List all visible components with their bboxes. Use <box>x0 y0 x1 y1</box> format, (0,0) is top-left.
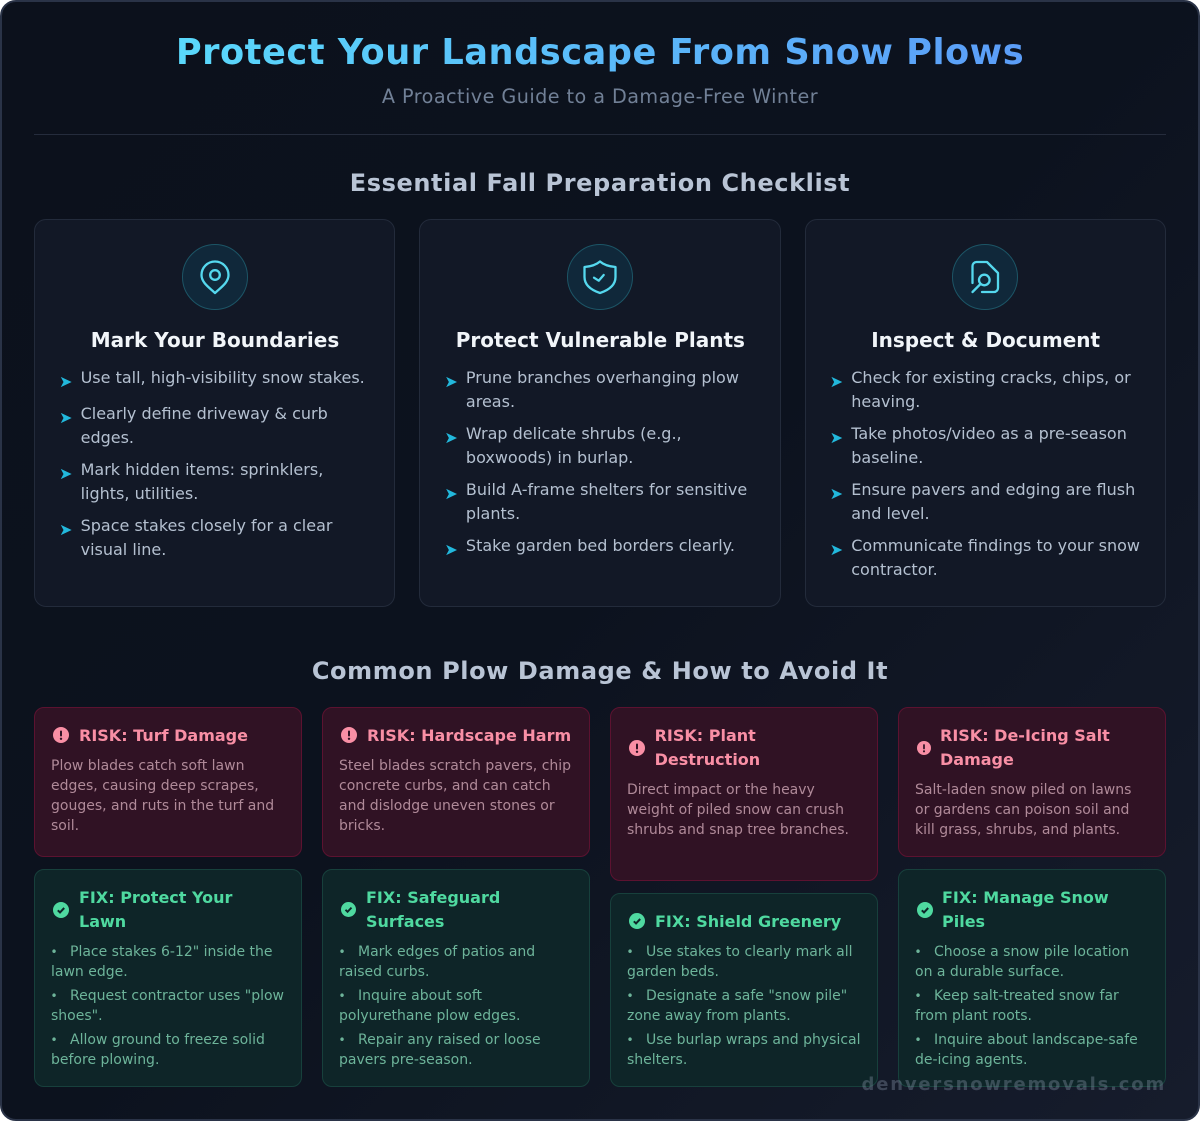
fix list: • <box>914 989 922 1003</box>
fix list <box>338 944 541 1068</box>
risk text: kill grass, shrubs, and plants. <box>915 822 1120 838</box>
heading: checklist: Essential Fall Preparation Checklist <box>350 169 850 197</box>
risk heading: RISK: Hardscape Harm <box>367 726 571 745</box>
arrow: ➤ <box>444 484 458 503</box>
fix list: • <box>914 1033 922 1047</box>
icon: check <box>917 902 933 918</box>
risk text: Steel blades scratch pavers, chip <box>339 758 571 774</box>
fix heading: Surfaces <box>366 912 444 931</box>
panel: fix shield greenery <box>610 893 878 1087</box>
risk heading <box>655 726 760 769</box>
fix list: • <box>626 945 634 959</box>
item 3 <box>466 480 747 523</box>
fix list: Choose a snow pile location <box>934 944 1129 960</box>
panel: mark your boundaries <box>34 219 395 607</box>
arrow: ➤ <box>830 372 843 391</box>
risk heading: RISK: Turf Damage <box>79 726 248 745</box>
fix heading: FIX: Shield Greenery <box>655 912 841 931</box>
item 4 <box>851 536 1140 579</box>
title: Protect Your Landscape From Snow Plows <box>176 32 1024 73</box>
item 1: heaving. <box>851 392 920 411</box>
item 3: and level. <box>851 504 930 523</box>
panel: risk de-icing salt damage <box>898 707 1166 857</box>
arrow: ➤ <box>444 540 458 559</box>
item 1: Use tall, high-visibility snow stakes. <box>81 368 365 387</box>
item 4: contractor. <box>851 560 938 579</box>
item 2 <box>81 404 328 447</box>
risk text <box>627 782 849 838</box>
fix list: de-icing agents. <box>915 1052 1027 1068</box>
item 1 <box>466 368 739 411</box>
fix list: • <box>338 1033 346 1047</box>
fix list: on a durable surface. Keep salt-treated snow far <box>915 964 1119 1004</box>
icon: document search <box>952 244 1018 310</box>
item 1: Check for existing cracks, chips, or <box>851 368 1131 387</box>
item 4: Stake garden bed borders clearly. <box>466 536 735 555</box>
fix heading: FIX: Protect Your <box>79 888 232 907</box>
item 2: Wrap delicate shrubs (e.g., <box>466 424 682 443</box>
item 4: Communicate findings to your snow <box>851 536 1140 555</box>
item 2 <box>851 424 1127 467</box>
item 3: Build A-frame shelters for sensitive <box>466 480 747 499</box>
fix list: • <box>338 945 346 959</box>
fix heading: FIX: Manage Snow <box>942 888 1109 907</box>
item 2: Take photos/video as a pre-season <box>851 424 1127 443</box>
icon: alert <box>629 740 645 756</box>
risk text: Plow blades catch soft lawn <box>51 758 244 774</box>
fix list: Mark edges of patios and <box>358 944 535 960</box>
fix list: polyurethane plow edges. Repair any raised or loose <box>339 1008 541 1048</box>
fix heading <box>79 888 232 931</box>
risk text: concrete curbs, and can catch <box>339 778 551 794</box>
risk text: soil. <box>51 818 79 834</box>
title <box>2 31 1198 75</box>
panel: fix protect your lawn <box>34 869 302 1087</box>
arrow: ➤ <box>59 408 72 427</box>
item 3 <box>851 480 1135 523</box>
watermark: denversnowremovals.com <box>862 1074 1166 1095</box>
fix heading <box>942 888 1109 931</box>
item 2: baseline. <box>851 448 923 467</box>
fix list: • <box>338 989 346 1003</box>
fix list: from plant roots. Inquire about landscape-safe <box>915 1008 1138 1048</box>
icon: alert <box>53 727 69 743</box>
item 4: Space stakes closely for a clear <box>81 516 332 535</box>
item 3: Mark hidden items: sprinklers, <box>81 460 323 479</box>
fix heading <box>366 888 500 931</box>
icon: map pin <box>182 244 248 310</box>
icon: check <box>53 902 69 918</box>
icon: check <box>629 913 645 929</box>
item 2 <box>466 424 682 467</box>
risk text: and dislodge uneven stones or <box>339 798 555 814</box>
risk text: gouges, and ruts in the turf and <box>51 798 274 814</box>
item 1: Prune branches overhanging plow <box>466 368 739 387</box>
arrow: ➤ <box>444 372 458 391</box>
panel: risk plant destruction <box>610 707 878 881</box>
fix heading: FIX: Safeguard <box>366 888 500 907</box>
arrow: ➤ <box>830 484 843 503</box>
panel: fix manage snow piles <box>898 869 1166 1087</box>
card heading: Inspect & Document <box>871 328 1100 352</box>
fix heading: Lawn <box>79 912 126 931</box>
icon: alert <box>917 741 931 755</box>
panel: inspect and document <box>805 219 1166 607</box>
fix list: • <box>914 945 922 959</box>
arrow: ➤ <box>59 372 72 391</box>
risk text: shrubs and snap tree branches. <box>627 822 849 838</box>
item 2: edges. <box>81 428 134 447</box>
fix list: Use stakes to clearly mark all <box>646 944 852 960</box>
risk heading: RISK: De-Icing Salt <box>940 726 1110 745</box>
fix list: shelters. <box>627 1052 687 1068</box>
icon: alert <box>341 727 357 743</box>
risk text <box>915 782 1131 838</box>
heading: plow damage: Common Plow Damage & How to Avoid It <box>312 657 888 685</box>
panel: protect vulnerable plants <box>419 219 781 607</box>
icon: shield check <box>567 244 633 310</box>
risk heading <box>940 726 1110 769</box>
risk text: edges, causing deep scrapes, <box>51 778 259 794</box>
fix list: Place stakes 6-12" inside the <box>70 944 273 960</box>
item 2: Clearly define driveway & curb <box>81 404 328 423</box>
fix list: • <box>50 989 58 1003</box>
fix list <box>50 944 284 1068</box>
item 3 <box>81 460 323 503</box>
fix list: garden beds. Designate a safe "snow pile" <box>627 964 847 1004</box>
risk text: or gardens can poison soil and <box>915 802 1129 818</box>
arrow: ➤ <box>444 428 458 447</box>
risk text: bricks. <box>339 818 385 834</box>
fix list <box>914 944 1138 1068</box>
item 3: plants. <box>466 504 520 523</box>
arrow: ➤ <box>59 464 72 483</box>
item 3: lights, utilities. <box>81 484 198 503</box>
risk heading: Destruction <box>655 750 760 769</box>
subtitle: A Proactive Guide to a Damage-Free Winter <box>382 85 818 108</box>
item 1: areas. <box>466 392 515 411</box>
fix list: before plowing. <box>51 1052 159 1068</box>
item 1 <box>851 368 1131 411</box>
fix list: pavers pre-season. <box>339 1052 473 1068</box>
arrow: ➤ <box>59 520 72 539</box>
panel: fix safeguard surfaces <box>322 869 590 1087</box>
panel: risk turf damage <box>34 707 302 857</box>
fix list: raised curbs. Inquire about soft <box>339 964 482 1004</box>
item 4: visual line. <box>81 540 166 559</box>
fix list: • <box>626 989 634 1003</box>
risk text: weight of piled snow can crush <box>627 802 844 818</box>
fix list: • <box>626 1033 634 1047</box>
fix list: • <box>50 1033 58 1047</box>
panel: risk hardscape harm <box>322 707 590 857</box>
risk text: Direct impact or the heavy <box>627 782 815 798</box>
item 4 <box>81 516 332 559</box>
risk text <box>51 758 274 834</box>
fix list: shoes". Allow ground to freeze solid <box>51 1008 265 1048</box>
item 3: Ensure pavers and edging are flush <box>851 480 1135 499</box>
risk heading: Damage <box>940 750 1014 769</box>
arrow: ➤ <box>830 540 843 559</box>
risk heading: RISK: Plant <box>655 726 756 745</box>
fix list: • <box>50 945 58 959</box>
risk text: Salt-laden snow piled on lawns <box>915 782 1131 798</box>
card heading: Mark Your Boundaries <box>91 328 339 352</box>
icon: check <box>341 902 356 917</box>
fix list: lawn edge. Request contractor uses "plow <box>51 964 284 1004</box>
arrow: ➤ <box>830 428 843 447</box>
fix list: zone away from plants. Use burlap wraps and physical <box>627 1008 861 1048</box>
fix heading: Piles <box>942 912 985 931</box>
card heading: Protect Vulnerable Plants <box>456 328 745 352</box>
fix list <box>626 944 861 1068</box>
item 2: boxwoods) in burlap. <box>466 448 633 467</box>
risk text <box>339 758 571 834</box>
